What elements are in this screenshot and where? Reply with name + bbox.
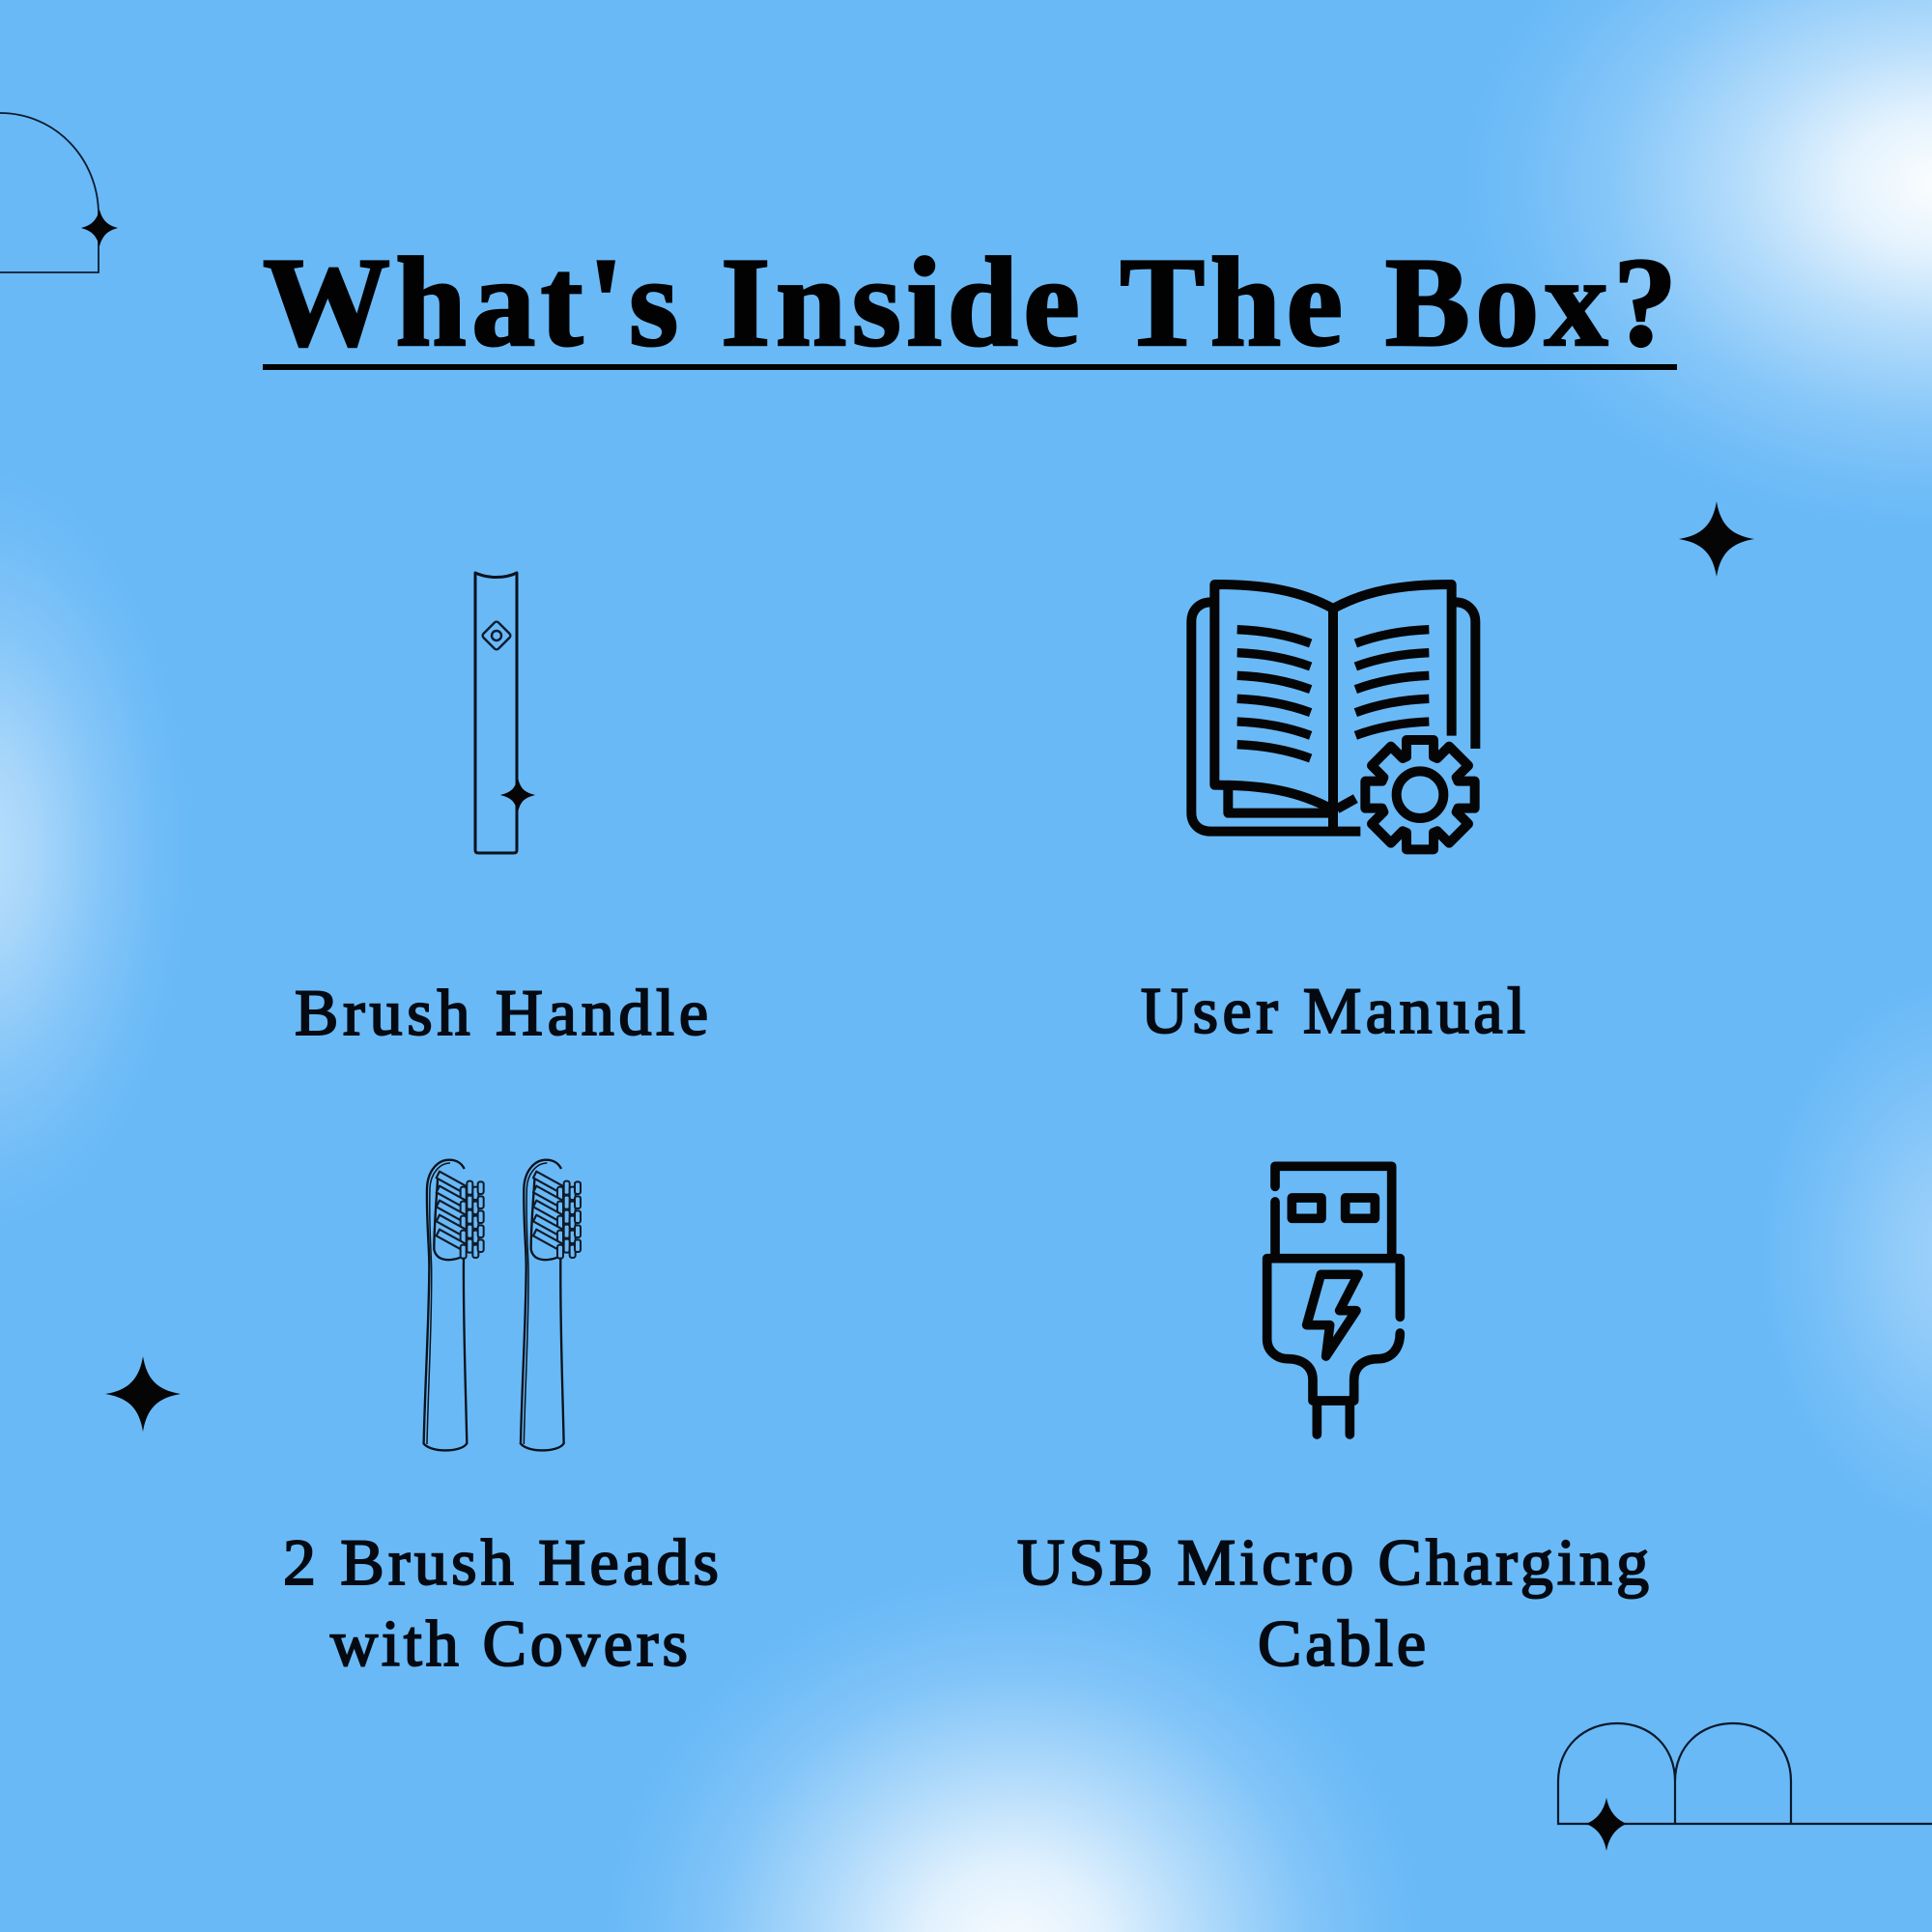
label: brush handle: Brush Handle: [295, 976, 708, 1049]
icon: USB charging cable: [1267, 1166, 1400, 1435]
decoration: top-left arch: [0, 113, 118, 272]
title: What's Inside The Box?: [263, 231, 1677, 373]
label: brush heads: 2 Brush Heads: [283, 1525, 719, 1599]
label: brush heads: [283, 1525, 719, 1680]
sparkle: top-left: [81, 210, 118, 246]
decoration: bottom-right arches: [1558, 1723, 1932, 1851]
sparkle: bottom-right: [1586, 1798, 1627, 1851]
brush head 2: [520, 1160, 581, 1450]
icon: brush handle: [475, 573, 535, 853]
brush head 1: [423, 1160, 484, 1450]
label: usb cable: Cable: [1258, 1606, 1426, 1680]
sparkle: upper right: [1679, 501, 1754, 577]
handle button: [481, 620, 512, 651]
label: user manual: User Manual: [1141, 974, 1525, 1047]
label: usb cable: [1017, 1525, 1649, 1680]
label: usb cable: USB Micro Charging: [1017, 1525, 1649, 1599]
gear: [1365, 740, 1475, 849]
icon: two brush heads: [423, 1160, 581, 1450]
handle sparkle: [500, 778, 535, 812]
sparkle: lower left: [105, 1356, 181, 1432]
title underline: [263, 364, 1677, 370]
icon: user manual book with gear: [1191, 584, 1475, 849]
label: brush heads: with Covers: [330, 1606, 688, 1680]
